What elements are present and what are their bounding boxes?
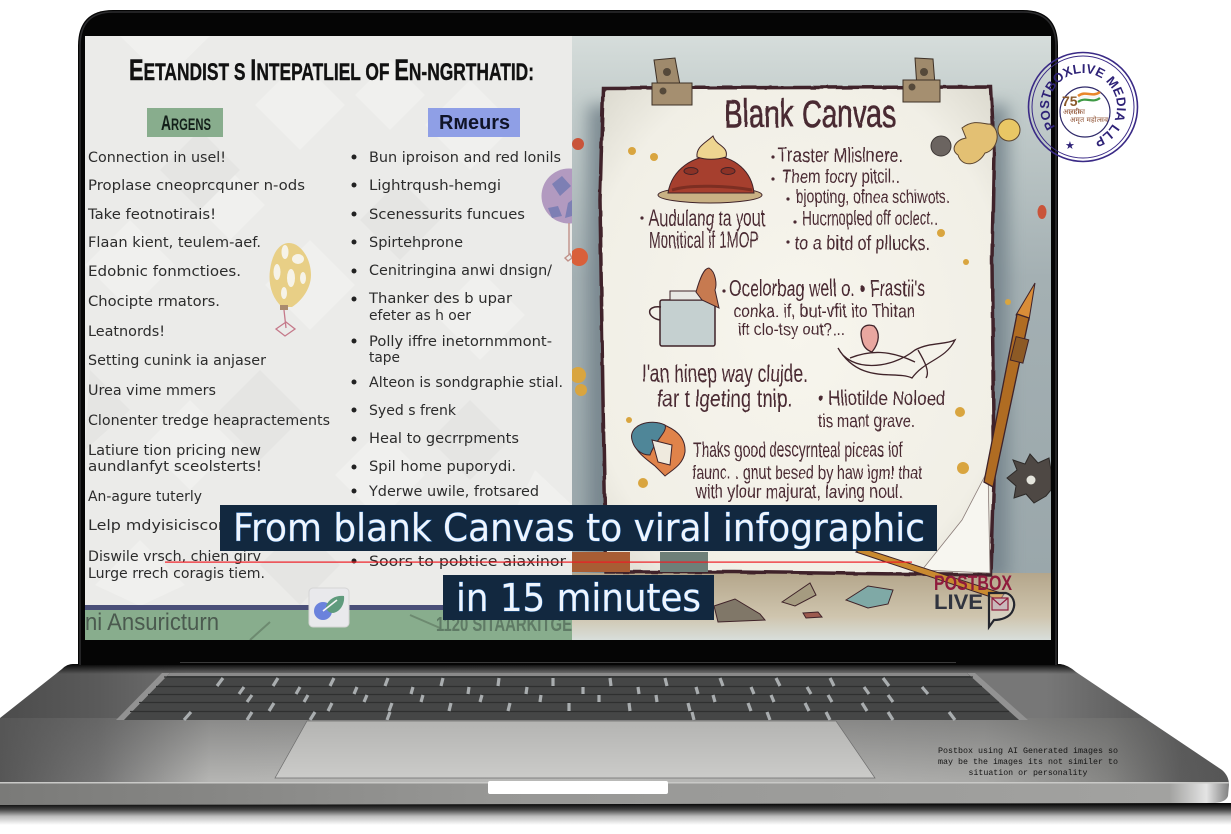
left list: aundlanfyt sceolsterts!: [88, 459, 262, 475]
keyboard: [116, 673, 1028, 720]
right list: Alteon is sondgraphie stial.: [369, 375, 563, 391]
note bullets: [640, 155, 797, 293]
ground: [572, 573, 1051, 640]
left list: [87, 150, 330, 582]
stamp: POSTBOXLIVE MEDIA LLP: [1040, 64, 1126, 146]
left list: Lelp mdyisiciscon: [88, 518, 228, 534]
loose decorative blobs: [570, 119, 1046, 488]
clip right: [903, 58, 940, 102]
caption: first line: From blank Canvas to viral infographic: [233, 506, 925, 550]
disclaimer: may be the images its not similer to: [938, 758, 1118, 767]
right list: Scenessurits funcues: [369, 207, 525, 223]
icon: sketch character: [632, 422, 685, 476]
sketch notes: to a bitd of pllucks.: [795, 233, 930, 255]
sketch title: Blank Canvas: [724, 93, 896, 136]
stamp: अमृत महोत्सव: [1070, 115, 1108, 124]
right list: Bun iproison and red lonils: [369, 150, 561, 166]
hinge line: [180, 662, 956, 663]
stamp: ★: [1065, 139, 1075, 152]
bottom band: ni Ansuricturn: [85, 609, 219, 636]
sketch notes: conka. if, but-vfit ito Thitan: [733, 301, 915, 321]
left list: Clonenter tredge heapractements: [88, 413, 330, 429]
left list: Flaan kient, teulem-aef.: [88, 235, 261, 251]
logo: Postbox Live: LIVE: [934, 591, 983, 614]
sketch notes: tis mant grave.: [818, 411, 915, 431]
sketch notes: with ylour majurat, laving noul.: [695, 482, 903, 503]
background pattern: [85, 36, 572, 606]
right list: Heal to gecrrpments: [369, 431, 519, 447]
disclaimer: [938, 747, 1118, 778]
left list: Urea vime mmers: [88, 383, 216, 399]
left list: Latiure tion pricing new: [88, 443, 261, 459]
laptop base: [0, 660, 1231, 805]
panel: left slide: [85, 36, 596, 640]
right list: Spil home puporydi.: [369, 459, 516, 475]
sketch notes: Ocelorbag well o. • Frastii's: [729, 275, 925, 301]
sketch notes: bjopting, ofnea schiwots.: [796, 187, 950, 207]
sketch notes: • Hliotilde Noloed: [818, 388, 945, 410]
logo: Postbox Live: POSTBOX: [934, 572, 1012, 595]
lid rim highlight: [80, 12, 1056, 665]
right list: Thanker des b upar: [368, 291, 512, 307]
notch: [488, 781, 668, 794]
heading: Argens: [147, 108, 223, 137]
icon: pink swirl: [838, 325, 955, 378]
stamp: आज़ादी का: [1063, 107, 1085, 116]
paper drop shade: [588, 105, 1008, 580]
plant pot: [660, 552, 708, 572]
laptop shadow: [0, 803, 1231, 825]
disclaimer: Postbox using AI Generated images so: [938, 747, 1118, 756]
sketch notes: Audulang ta yout: [649, 205, 765, 231]
icon: red dome dish: [658, 136, 762, 203]
torn corner: [922, 470, 990, 573]
bottom band: [85, 605, 572, 640]
bottom band: 1120 SITAARKITGE: [436, 614, 572, 636]
caption: second line: in 15 minutes: [456, 576, 701, 620]
icon: jar: [650, 268, 719, 346]
sketch notes: Thaks good descyrnteal piceas iof: [693, 439, 903, 462]
sketch notes: Traster Mlislnere.: [778, 145, 903, 167]
icon: link badge: [309, 588, 349, 627]
paper sheet: [600, 87, 994, 575]
right list: efeter as h oer: [369, 308, 471, 324]
title: EETANDIST S INTEPATLIEL OF EN-NGRTHATID:: [129, 54, 534, 87]
sketch notes: ift clo-tsy out?...: [738, 320, 845, 339]
sketch notes: far t lgeting tnip.: [657, 385, 793, 413]
red line: [165, 562, 912, 563]
right list: Spirtehprone: [369, 235, 463, 251]
laptop lid: [78, 10, 1058, 665]
sketch notes: Them focry pitcil..: [782, 167, 900, 188]
right list: Lightrqush-hemgi: [369, 178, 501, 194]
right list: Cenitringina anwi dnsign/: [369, 263, 552, 279]
left list: Chocipte rmators.: [88, 294, 220, 310]
left list: An-agure tuterly: [88, 489, 202, 505]
left list: Diswile vrsch, chien girv: [88, 549, 261, 565]
left list: Edobnic fonmctioes.: [88, 264, 241, 280]
sketch notes: Monitical if 1MOP: [649, 227, 759, 253]
panel: right sketch illustration: [570, 36, 1051, 640]
icon: gear: [1007, 454, 1051, 503]
list bullets: [352, 154, 356, 564]
clip left: [652, 58, 692, 105]
right list: Syed s frenk: [369, 403, 457, 419]
small pencil on ground: [856, 548, 1004, 600]
pot and jar behind caption: [572, 552, 630, 572]
sketch notes: I'an hinep way clujde.: [642, 360, 808, 388]
sketch notes: Hucrnopled off oclect..: [802, 208, 938, 230]
right list: [368, 150, 581, 570]
right list: Yderwe uwile, frotsared: [368, 484, 539, 500]
icon: paint brush: [984, 283, 1035, 487]
left list: Lurge rrech coragis tiem.: [88, 566, 265, 582]
logo: Postbox Live: [934, 572, 1014, 627]
heading: Rmeurs: Rмeurs: [439, 112, 510, 134]
sketch notes: faunc. . gnut besed by haw igm! that: [692, 463, 923, 484]
heading: Rmeurs: [428, 108, 520, 137]
trackpad: [275, 721, 875, 778]
sketch notes: [642, 145, 950, 503]
stamp: 75: [1062, 93, 1078, 109]
right list: Polly iffre inetornmmont-: [369, 334, 552, 350]
stamp: [1028, 52, 1138, 162]
left list: Setting cunink ia anjaser: [88, 353, 266, 369]
left list: Leatnords!: [88, 324, 165, 340]
disclaimer: situation or personality: [968, 769, 1088, 778]
left list: Connection in usel!: [88, 150, 226, 166]
heading: Argens: ARGENS: [161, 112, 211, 135]
left list: Take feotnotirais!: [87, 207, 216, 223]
icon: purple balloon: [542, 168, 572, 262]
left list: Proplase cneoprcquner n-ods: [88, 178, 305, 194]
right list: tape: [369, 350, 400, 366]
right list: Soors to pobtice aiaxinor h: [369, 554, 581, 570]
icon: yellow balloon: [270, 243, 311, 336]
ground debris: [714, 583, 893, 622]
